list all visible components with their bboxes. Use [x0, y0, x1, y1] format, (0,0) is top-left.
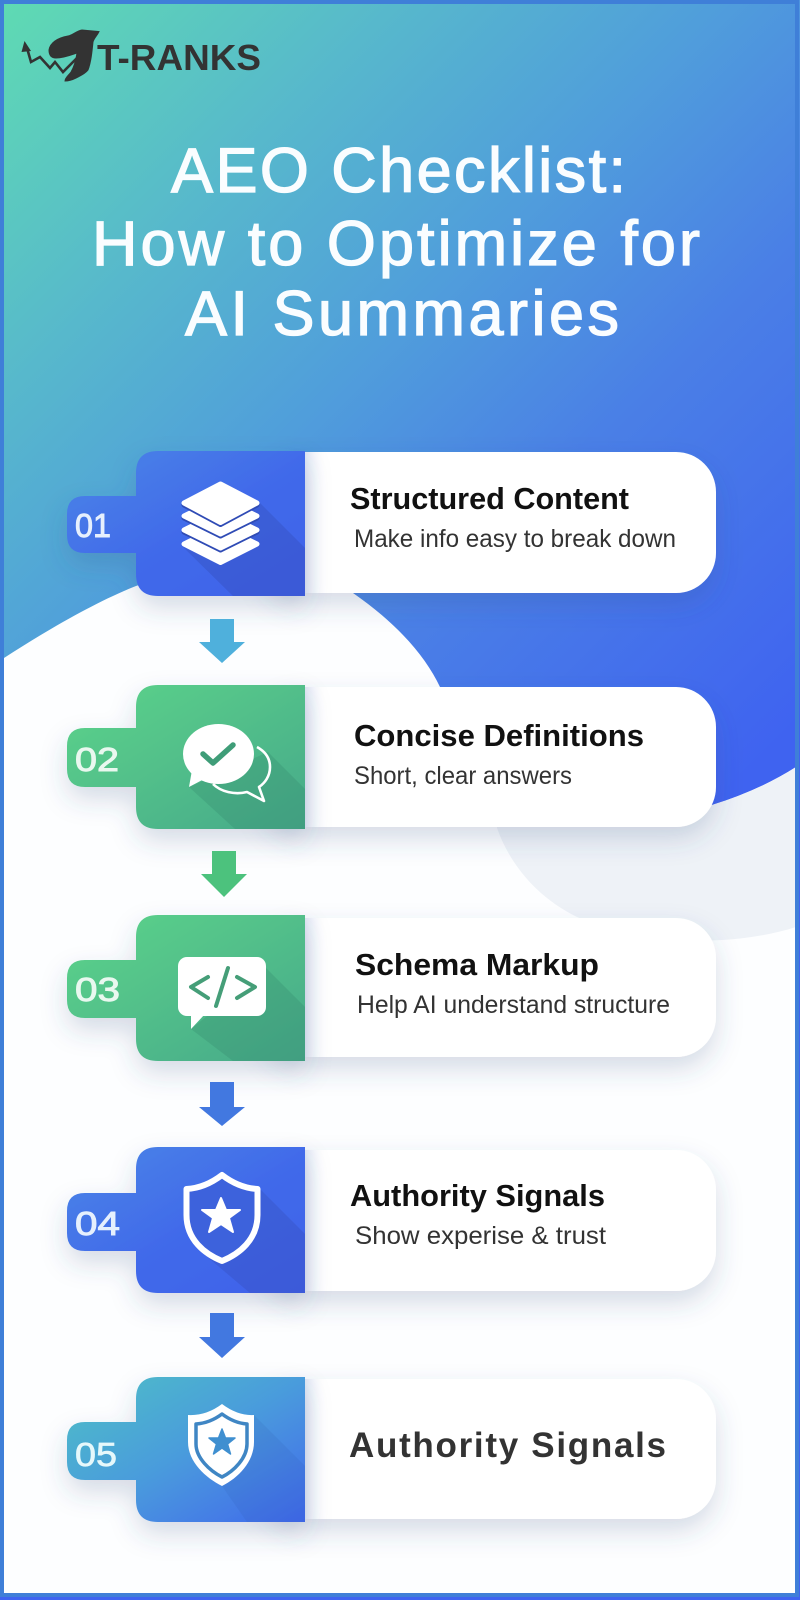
- number: 03: [75, 971, 120, 1008]
- heading: Authority Signals: [350, 1178, 605, 1213]
- icon: shield with blue star: [188, 1404, 254, 1486]
- title: AEO Checklist:: [171, 136, 626, 206]
- title: How to Optimize for: [92, 209, 700, 279]
- arrow 2: [201, 851, 247, 897]
- heading: Concise Definitions: [354, 718, 644, 753]
- text card: [260, 918, 716, 1057]
- icon: stacked layers: [184, 484, 257, 562]
- arrow 4: [199, 1313, 245, 1358]
- step 04 panel: [67, 1147, 716, 1293]
- step 03 panel: [67, 915, 716, 1061]
- arrow 1: [199, 619, 245, 663]
- number tab and icon block: [67, 915, 305, 1061]
- description: Help AI understand structure: [357, 991, 670, 1019]
- description: Show experise & trust: [355, 1222, 606, 1250]
- description: Make info easy to break down: [354, 525, 676, 553]
- number: 02: [75, 741, 119, 778]
- icon: chat bubbles with check: [183, 724, 270, 801]
- text card: [260, 452, 716, 593]
- title: AI Summaries: [185, 279, 619, 349]
- heading: Authority Signals: [349, 1426, 666, 1465]
- number tab and icon block: [67, 685, 305, 829]
- icon: rising zigzag arrow: [22, 41, 77, 72]
- number tab and icon block: [67, 451, 305, 596]
- step 01 panel: [67, 451, 716, 596]
- heading: Structured Content: [350, 481, 629, 516]
- arrow 3: [199, 1082, 245, 1126]
- text card: [260, 1150, 716, 1291]
- pale grey curved background shape: [497, 767, 796, 941]
- number: 05: [75, 1436, 117, 1473]
- icon: dinosaur head: [49, 30, 99, 81]
- text card: [260, 1379, 716, 1519]
- title: [92, 136, 700, 349]
- icon: shield with star: [186, 1175, 258, 1261]
- heading: Schema Markup: [355, 947, 599, 982]
- logo: T-RANKS: [22, 30, 261, 81]
- white curved background shape: [4, 566, 796, 1594]
- number tab and icon block: [67, 1377, 305, 1522]
- description: Short, clear answers: [354, 762, 572, 790]
- step 02 panel: [67, 685, 716, 829]
- number: 04: [75, 1205, 120, 1242]
- step 05 panel: [67, 1377, 716, 1522]
- number: 01: [75, 507, 111, 544]
- logo wordmark: T-RANKS: [97, 37, 261, 78]
- text card: [260, 687, 716, 827]
- icon: code speech bubble: [178, 957, 266, 1029]
- number tab and icon block: [67, 1147, 305, 1293]
